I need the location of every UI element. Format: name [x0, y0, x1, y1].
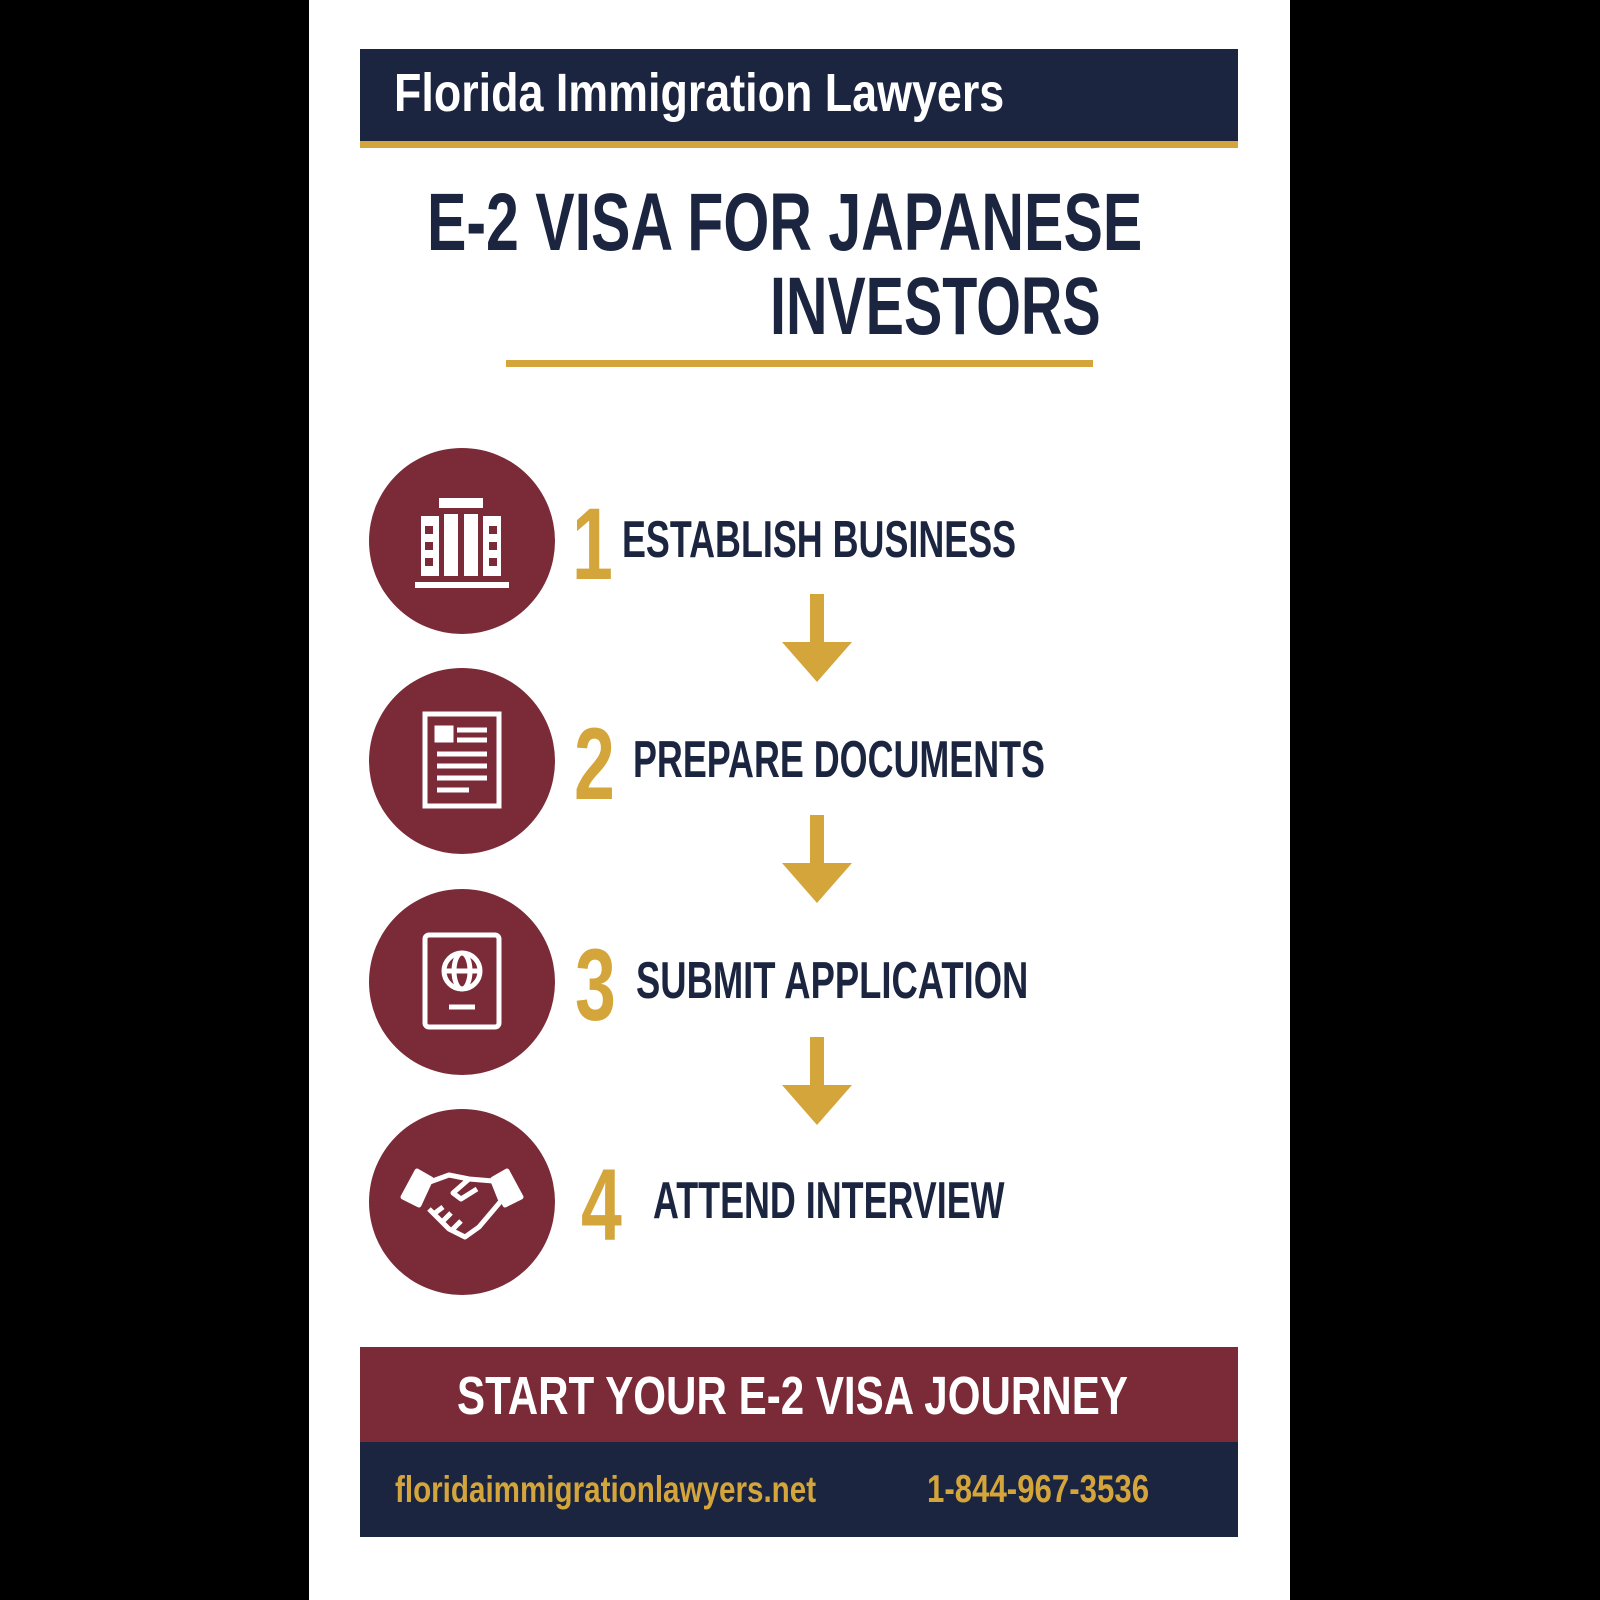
- step 2: [369, 668, 1045, 854]
- contact bar: [360, 1442, 1238, 1537]
- icon: passport: [369, 889, 555, 1075]
- step 4: [369, 1109, 1005, 1295]
- step 3: [369, 889, 1028, 1075]
- number 1: 1: [572, 487, 613, 601]
- phone: 1-844-967-3536: [927, 1468, 1149, 1511]
- panel: white page: [309, 0, 1290, 1600]
- label: SUBMIT APPLICATION: [636, 952, 1028, 1010]
- title: E-2 VISA FOR JAPANESE: [427, 177, 1142, 268]
- arrow 3: [782, 1037, 852, 1125]
- icon: document: [369, 668, 555, 854]
- label: ATTEND INTERVIEW: [653, 1172, 1005, 1230]
- website: floridaimmigrationlawyers.net: [395, 1469, 816, 1510]
- number 3: 3: [575, 928, 616, 1042]
- title: [427, 177, 1142, 352]
- label: ESTABLISH BUSINESS: [622, 511, 1016, 569]
- step 1: [369, 448, 1016, 634]
- icon: handshake: [369, 1109, 555, 1295]
- CTA text: START YOUR E-2 VISA JOURNEY: [457, 1366, 1128, 1426]
- number 2: 2: [574, 707, 615, 821]
- title underline: [506, 360, 1093, 367]
- number 4: 4: [581, 1148, 622, 1262]
- header text: Florida Immigration Lawyers: [394, 63, 1004, 123]
- header bar: [360, 49, 1238, 148]
- arrow 2: [782, 815, 852, 903]
- arrow 1: [782, 594, 852, 682]
- CTA bar: [360, 1347, 1238, 1442]
- icon: building: [369, 448, 555, 634]
- label: PREPARE DOCUMENTS: [633, 731, 1045, 789]
- title: INVESTORS: [770, 261, 1101, 352]
